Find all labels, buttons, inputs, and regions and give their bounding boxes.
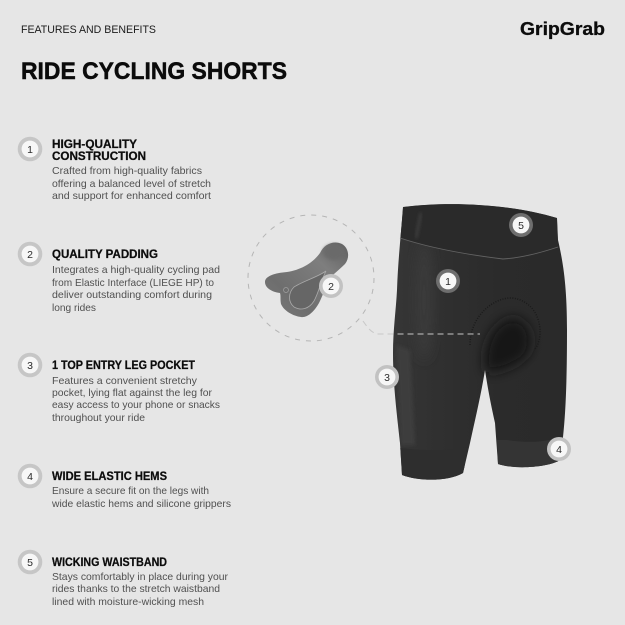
description 3	[52, 376, 220, 424]
feature 3: leg pocket	[18, 353, 220, 424]
heading 1: CONSTRUCTION	[52, 150, 146, 163]
description 5: rides thanks to the stretch waistband	[52, 584, 220, 595]
marker 2 on pad: 2	[328, 281, 334, 293]
description 1	[52, 166, 211, 202]
description 5	[52, 572, 229, 608]
heading 1	[52, 138, 146, 163]
description 1: and support for enhanced comfort	[52, 191, 211, 202]
marker 2 on pad	[319, 274, 343, 298]
heading 1: HIGH-QUALITY	[52, 138, 137, 151]
badge 3	[18, 353, 42, 377]
pad detail: dashed circle	[248, 215, 374, 341]
heading 2: QUALITY PADDING	[52, 248, 158, 261]
description 4: Ensure a secure fit on the legs with	[52, 486, 209, 497]
description 5: Stays comfortably in place during your	[52, 572, 229, 583]
illustration: cycling pad	[265, 242, 348, 317]
marker 4 on shorts	[547, 437, 571, 461]
badge 3: 3	[27, 360, 33, 372]
marker 4 on shorts: 4	[556, 444, 562, 456]
marker 5 on shorts: 5	[518, 220, 524, 232]
logo: GripGrab: GripGrab	[520, 19, 605, 39]
title: RIDE CYCLING SHORTS	[21, 59, 287, 85]
description 2: deliver outstanding comfort during	[52, 290, 212, 301]
description 3: easy access to your phone or snacks	[52, 400, 220, 411]
badge 4: 4	[27, 471, 33, 483]
marker 5 on shorts	[509, 213, 533, 237]
heading 4: WIDE ELASTIC HEMS	[52, 470, 167, 483]
marker 3 on shorts	[375, 365, 399, 389]
subtitle: features and benefits: FEATURES AND BENEFITS	[21, 24, 156, 36]
badge 1: 1	[27, 144, 33, 156]
feature 5: wicking waistband	[18, 550, 229, 608]
description 1: offering a balanced level of stretch	[52, 179, 211, 190]
feature 1: high-quality construction	[18, 137, 211, 202]
chamois stitching	[470, 298, 540, 350]
leader line from pad to shorts	[363, 321, 480, 334]
description 3: pocket, lying flat against the leg for	[52, 388, 213, 399]
badge 5	[18, 550, 42, 574]
marker 1 on shorts	[436, 269, 460, 293]
feature 4: wide elastic hems	[18, 464, 231, 510]
heading 3: 1 TOP ENTRY LEG POCKET	[52, 359, 195, 372]
illustration: cycling shorts	[393, 204, 567, 480]
badge 4	[18, 464, 42, 488]
description 2: from Elastic Interface (LIEGE HP) to	[52, 278, 214, 289]
badge 5: 5	[27, 557, 33, 569]
heading 5: WICKING WAISTBAND	[52, 556, 167, 569]
description 4	[51, 486, 231, 510]
description 4: wide elastic hems and silicone grippers	[51, 499, 231, 510]
description 2: Integrates a high-quality cycling pad	[52, 265, 220, 276]
waistband seam	[400, 238, 558, 259]
badge 2	[18, 242, 42, 266]
marker 1 on shorts: 1	[445, 276, 451, 288]
description 3: Features a convenient stretchy	[52, 376, 198, 387]
description 2	[52, 265, 220, 314]
feature 2: quality padding	[18, 242, 220, 314]
badge 2: 2	[27, 249, 33, 261]
badge 1	[18, 137, 42, 161]
marker 3 on shorts: 3	[384, 372, 390, 384]
description 1: Crafted from high-quality fabrics	[52, 166, 202, 177]
description 5: lined with moisture-wicking mesh	[52, 597, 204, 608]
description 2: long rides	[52, 303, 96, 314]
description 3: throughout your ride	[52, 413, 145, 424]
